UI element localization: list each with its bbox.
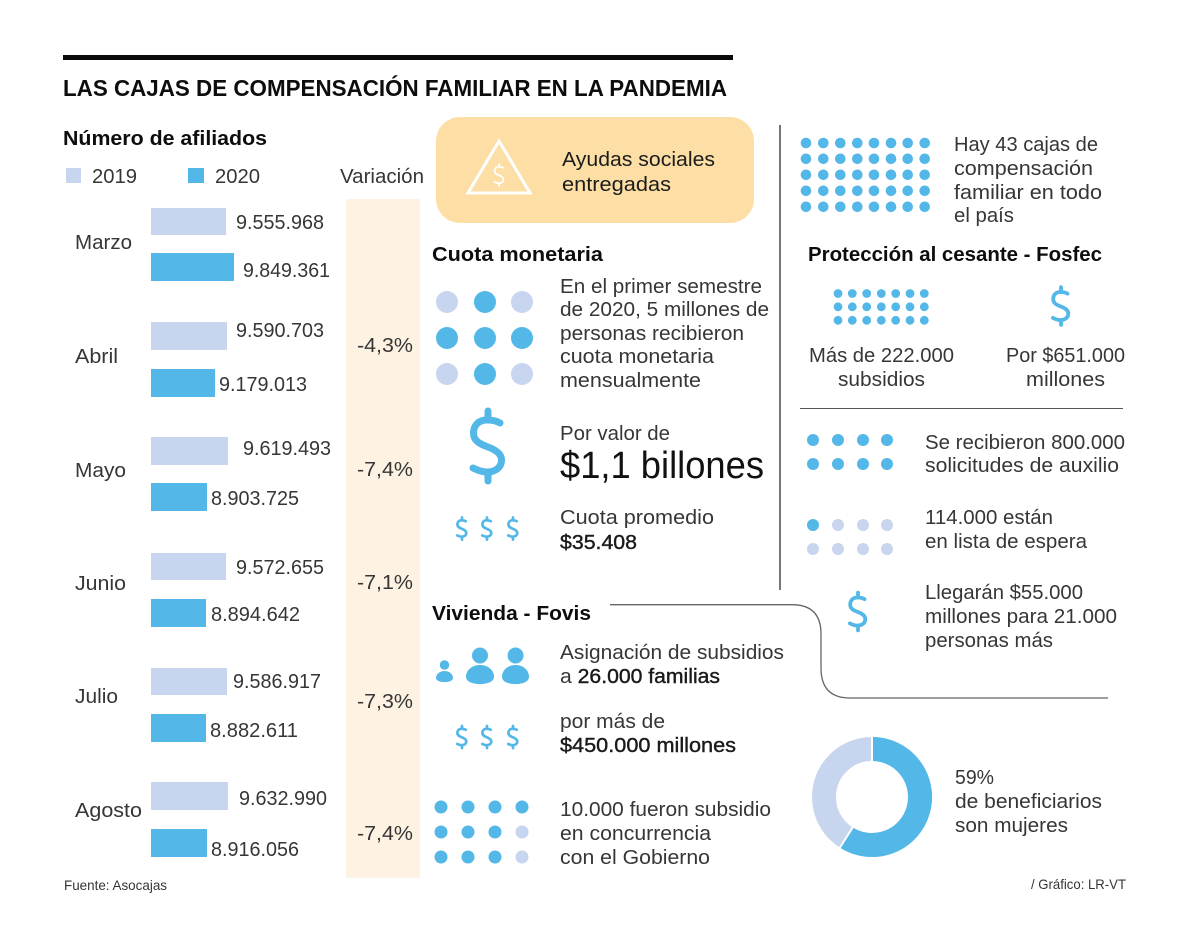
bar group: julio: 9.586.917 <box>233 671 321 693</box>
text: por valor de: Por valor de <box>560 423 670 445</box>
icon: dot grid 222.000 <box>834 289 929 325</box>
credit: / Gráfico: LR-VT <box>1031 876 1126 892</box>
heading: número de afiliados: Número de afiliados <box>63 128 267 150</box>
icon: dots twelve <box>434 800 528 864</box>
text: 59%: son mujeres <box>955 815 1068 837</box>
icon: dots lista de espera <box>807 519 893 555</box>
text: llegarán <box>925 582 1117 652</box>
icon: dollar llegarán <box>850 593 865 630</box>
bar group: agosto: 8.916.056 <box>211 839 299 861</box>
text: por más de: $450.000 millones <box>560 735 736 757</box>
text: primer semestre: mensualmente <box>560 370 701 392</box>
bar group: abril <box>75 320 324 397</box>
text: 10.000 fueron: con el Gobierno <box>560 847 710 869</box>
text: hay 43 cajas: familiar en todo <box>954 182 1102 204</box>
icon: triangle with dollar <box>468 141 530 193</box>
variation values: -7,1% <box>357 572 413 594</box>
variation values: -4,3% <box>357 335 413 357</box>
text: ayudas sociales entregadas: Ayudas sociales <box>562 149 715 171</box>
icon: dollar fosfec <box>1053 287 1068 325</box>
bar group: marzo: Marzo <box>75 232 132 254</box>
title: LAS CAJAS DE COMPENSACIÓN FAMILIAR EN LA PANDEMIA <box>63 74 727 101</box>
icon: dot grid 43 <box>801 138 930 212</box>
text: cuota promedio: Cuota promedio <box>560 507 714 529</box>
variation band <box>346 199 420 878</box>
text: por $651.000 millones: Por $651.000 <box>1006 345 1125 367</box>
donut chart <box>824 736 920 849</box>
panel: número de afiliados <box>63 128 424 878</box>
bar group: junio: 9.572.655 <box>236 557 324 579</box>
text: primer semestre: de 2020, 5 millones de <box>560 299 769 321</box>
text: asignación de subsidios <box>560 642 784 688</box>
text: 10.000 fueron: en concurrencia <box>560 823 712 845</box>
bar group: junio: 8.894.642 <box>211 604 300 626</box>
text: 10.000 fueron <box>560 799 771 869</box>
text: por valor de: $1,1 billones <box>560 445 764 487</box>
bar group: agosto: Agosto <box>75 800 142 822</box>
variation values <box>357 335 413 845</box>
variation values: -7,3% <box>357 691 413 713</box>
bar group: agosto <box>75 782 327 861</box>
bar group: agosto: 9.632.990 <box>239 788 327 810</box>
text: cuota promedio <box>560 507 714 554</box>
bar group: mayo: Mayo <box>75 460 126 482</box>
divider: vertical <box>779 125 781 590</box>
bar group: mayo: 9.619.493 <box>243 438 331 460</box>
text: hay 43 cajas: compensación <box>954 158 1093 180</box>
heading: cuota monetaria: Cuota monetaria <box>432 244 604 266</box>
text: llegarán: millones para 21.000 <box>925 606 1117 628</box>
text: 59%: 59% <box>955 767 994 789</box>
bar group: julio <box>75 668 321 742</box>
text: solicitudes: Se recibieron 800.000 <box>925 432 1125 454</box>
top bar <box>63 55 733 60</box>
text: lista de espera: en lista de espera <box>925 531 1088 553</box>
legend <box>66 166 260 188</box>
text: solicitudes <box>925 432 1125 477</box>
icon: three dollars <box>457 517 517 540</box>
bar group: marzo: 9.849.361 <box>243 260 330 282</box>
icon: dots solicitudes <box>807 434 893 470</box>
text: cuota promedio: $35.408 <box>560 532 637 554</box>
text: primer semestre: cuota monetaria <box>560 346 715 368</box>
legend: 2019 <box>92 166 137 188</box>
text: asignación de subsidios: Asignación de subsidios <box>560 642 784 664</box>
icon: people <box>436 648 529 684</box>
heading: vivienda fovis: Vivienda - Fovis <box>432 603 591 625</box>
source: Fuente: Asocajas <box>64 877 167 893</box>
bar group: julio: 8.882.611 <box>210 720 298 742</box>
bar group: marzo <box>75 208 330 282</box>
text: ayudas sociales entregadas: entregadas <box>562 174 671 196</box>
variation values: -7,4% <box>357 823 413 845</box>
variation values: -7,4% <box>357 459 413 481</box>
text: lista de espera <box>925 507 1088 553</box>
bar group: abril: 9.590.703 <box>236 320 324 342</box>
text: más de 222.000 subsidios <box>809 345 954 391</box>
icon: three dollars vivienda <box>457 726 517 748</box>
text: asignación de subsidios: a 26.000 familias <box>560 666 720 688</box>
bar group: abril: 9.179.013 <box>219 374 307 396</box>
text: hay 43 cajas: Hay 43 cajas de <box>954 134 1098 156</box>
text: lista de espera: 114.000 están <box>925 507 1053 529</box>
text: 59% <box>955 767 1102 837</box>
text: ayudas sociales entregadas <box>562 149 715 196</box>
text: por valor de <box>560 423 764 487</box>
text: por $651.000 millones <box>1006 345 1125 391</box>
heading: protección al cesante: Protección al cesante - Fosfec <box>808 244 1102 266</box>
panel: ayudas sociales <box>436 117 754 223</box>
text: primer semestre: personas recibieron <box>560 323 744 345</box>
text: más de 222.000 subsidios: Más de 222.000 <box>809 345 954 367</box>
bar group: abril: Abril <box>75 346 118 368</box>
text: por más de <box>560 711 736 757</box>
text: primer semestre <box>560 276 769 392</box>
text: primer semestre: En el primer semestre <box>560 276 762 298</box>
heading: variación: Variación <box>340 166 424 188</box>
text: hay 43 cajas: el país <box>954 205 1014 227</box>
text: 10.000 fueron: 10.000 fueron subsidio <box>560 799 771 821</box>
divider: curved <box>610 605 1108 698</box>
text: 59%: de beneficiarios <box>955 791 1102 813</box>
bar group: junio <box>75 553 324 627</box>
bar group: junio: Junio <box>75 573 126 595</box>
bar group: marzo: 9.555.968 <box>236 212 324 234</box>
text: solicitudes: solicitudes de auxilio <box>925 455 1119 477</box>
icon: dots nine <box>436 291 533 385</box>
text: más de 222.000 subsidios: subsidios <box>838 369 925 391</box>
text: llegarán: Llegarán $55.000 <box>925 582 1083 604</box>
text: hay 43 cajas <box>954 134 1102 227</box>
legend: 2020 <box>215 166 260 188</box>
bar group: mayo: 8.903.725 <box>211 488 299 510</box>
bar group: mayo <box>75 437 331 511</box>
text: por más de: por más de <box>560 711 665 733</box>
text: por $651.000 millones: millones <box>1026 369 1105 391</box>
text: llegarán: personas más <box>925 630 1053 652</box>
bar group: julio: Julio <box>75 686 118 708</box>
icon: big dollar <box>473 411 502 481</box>
